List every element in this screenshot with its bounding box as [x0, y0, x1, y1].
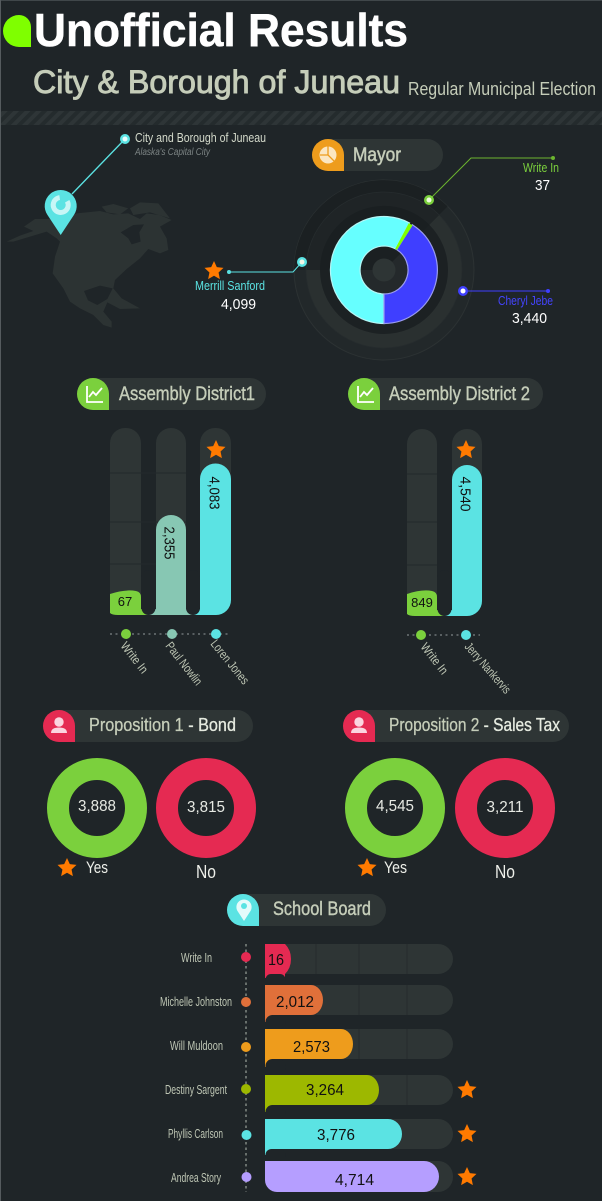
callout: Write In: 37 — [535, 177, 550, 194]
bar value: 2,355: 2,355 — [160, 526, 178, 560]
panel: mayor — [195, 139, 559, 360]
label: Yes: Yes — [86, 858, 108, 877]
panel: assembly district 1 — [77, 378, 266, 688]
assembly district 2 heading — [348, 378, 543, 410]
label: No: No — [495, 862, 515, 882]
candidate labels: Andrea Story — [171, 1171, 222, 1185]
legend: assembly district 1: Write In — [118, 639, 151, 676]
panel: school board — [160, 894, 477, 1192]
callout: Merrill Sanford: 4,099 — [221, 296, 256, 313]
bar value: 16: 16 — [268, 952, 284, 969]
map of North America — [7, 202, 172, 328]
legend: assembly district 2: Write In — [418, 640, 451, 677]
bar: Loren Jones — [193, 464, 231, 615]
bar: Phyllis Carlson 3,776 — [265, 1119, 402, 1155]
label: No: No — [196, 862, 216, 882]
bar: Will Muldoon 2,573 — [265, 1029, 353, 1067]
mayor donut chart — [294, 180, 474, 360]
panel: assembly district 2 — [348, 378, 543, 697]
bar: Write In — [110, 590, 150, 615]
school board heading — [227, 894, 386, 926]
bar value: 2,573: 2,573 — [293, 1039, 330, 1056]
proposition 1 heading — [43, 710, 253, 742]
slice: Merrill Sanford — [330, 216, 410, 324]
notches between bars — [266, 974, 286, 1161]
bar value: 849: 849 — [411, 595, 433, 610]
icon: winner star — [206, 440, 226, 458]
donut: Yes 3,888 — [58, 769, 136, 847]
title block — [3, 4, 596, 100]
legend: assembly district 2 — [407, 630, 514, 697]
callout: Write In — [424, 156, 559, 205]
icon: location pin — [45, 190, 77, 235]
bar value: 2,012: 2,012 — [276, 994, 314, 1011]
map sublabel: Alaska's Capital City — [134, 147, 211, 158]
proposition 2 heading: Proposition 2 - Sales Tax — [389, 715, 560, 735]
callout: Merrill Sanford — [195, 257, 307, 313]
slice: Write In — [395, 223, 413, 250]
assembly district 2 heading: Assembly District 2 — [389, 384, 530, 405]
candidate labels: Phyllis Carlson — [168, 1127, 223, 1141]
callout: Merrill Sanford: Merrill Sanford — [195, 278, 265, 293]
bar value: 4,714: 4,714 — [335, 1172, 374, 1189]
legend: assembly district 1 — [110, 629, 252, 688]
candidate labels: Write In — [181, 951, 212, 965]
panel: proposition 2 — [343, 710, 569, 882]
bar: Destiny Sargent 3,264 — [265, 1075, 379, 1112]
candidate dots — [241, 952, 252, 1182]
donut: No 3,211 — [466, 769, 544, 847]
bar: Paul Nowlin — [148, 515, 196, 615]
callout: Write In: Write In — [523, 160, 559, 175]
legend: assembly district 2: Jerry Nankervis — [462, 640, 514, 697]
bar value: 4,540: 4,540 — [456, 476, 474, 512]
proposition 1 heading: Proposition 1 - Bond — [89, 715, 236, 735]
panel: proposition 1 — [43, 710, 253, 882]
icon: green teardrop — [3, 15, 31, 47]
hatched divider band — [1, 111, 602, 125]
bar: Andrea Story 4,714 — [265, 1161, 439, 1192]
callout: Cheryl Jebe — [458, 286, 553, 327]
icon: winner star — [57, 858, 77, 876]
subtitle: city: City & Borough of Juneau — [33, 64, 400, 100]
bar: Michelle Johnston 2,012 — [265, 985, 323, 1022]
candidate labels — [160, 951, 232, 1185]
map panel — [7, 131, 266, 328]
bar chart: assembly district 2 — [407, 429, 482, 616]
candidate labels: Destiny Sargent — [165, 1083, 227, 1097]
assembly district 1 heading: Assembly District1 — [119, 384, 255, 405]
bar value: 67: 67 — [118, 594, 132, 609]
icon: winner star — [456, 440, 476, 458]
proposition 2 heading — [343, 710, 569, 742]
map label: City and Borough of Juneau — [135, 131, 266, 145]
school board heading: School Board — [273, 899, 371, 920]
slice: Cheryl Jebe — [384, 225, 437, 324]
bar value: 3,776: 3,776 — [317, 1127, 355, 1144]
donut: No 3,815: 3,815 — [187, 799, 225, 816]
winner stars — [457, 1080, 477, 1185]
pin connector dot — [120, 134, 130, 144]
callout: Cheryl Jebe: Cheryl Jebe — [498, 293, 553, 308]
bar chart: assembly district 1 — [110, 428, 231, 615]
candidate labels: Michelle Johnston — [160, 995, 232, 1009]
bar value: 3,264: 3,264 — [306, 1082, 344, 1099]
assembly district 1 heading — [77, 378, 266, 410]
donut: No 3,211: 3,211 — [486, 799, 524, 816]
mayor heading: Mayor — [353, 145, 402, 166]
mayor heading — [312, 139, 443, 171]
callout: Cheryl Jebe: 3,440 — [512, 310, 547, 327]
label: Yes: Yes — [384, 858, 407, 877]
bar value: 4,083: 4,083 — [206, 476, 222, 510]
map pin connector — [72, 139, 125, 194]
donut: Yes 4,545: 4,545 — [376, 798, 414, 815]
bar: Write In 16 — [265, 944, 291, 978]
donut: Yes 4,545 — [356, 769, 434, 847]
legend: assembly district 1: Paul Nowlin — [163, 639, 205, 688]
timeline — [245, 944, 247, 1192]
bar: Jerry Nankervis — [444, 465, 482, 616]
legend: assembly district 1: Loren Jones — [208, 637, 252, 687]
bar: Write In — [407, 590, 446, 616]
bar chart: school board — [265, 944, 453, 1192]
donut: No 3,815 — [167, 769, 245, 847]
donut: Yes 3,888: 3,888 — [78, 798, 116, 815]
icon: winner star — [357, 858, 377, 876]
title: Unofficial Results — [34, 4, 408, 56]
candidate labels: Will Muldoon — [170, 1039, 223, 1053]
